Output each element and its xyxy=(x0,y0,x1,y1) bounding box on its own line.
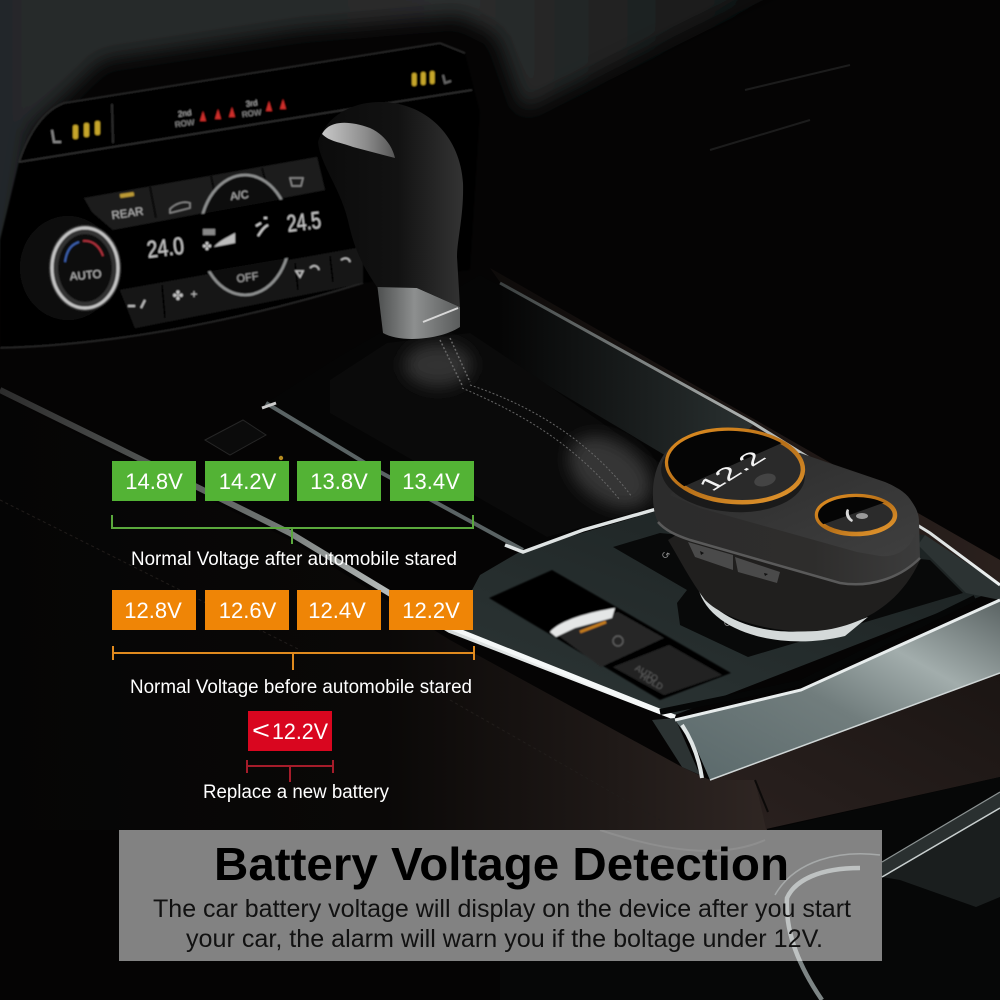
12.2V chip: 12.2V xyxy=(402,598,460,623)
drive selector panel xyxy=(613,533,963,657)
climate buttons lower row xyxy=(120,247,363,328)
right button xyxy=(735,557,780,583)
12.4V chip: 12.4V xyxy=(308,598,366,623)
device side shell xyxy=(653,446,920,584)
phone icon xyxy=(846,509,853,522)
climate control console xyxy=(0,43,480,348)
voltage reading: 12.2 xyxy=(692,448,773,495)
rear seat indicators: ROW xyxy=(174,118,195,129)
green caption: Normal Voltage after automobile stared xyxy=(131,549,457,570)
climate control console: A/C xyxy=(230,189,250,203)
rear seat indicators: ROW xyxy=(241,108,262,119)
gear boot leather xyxy=(330,333,665,537)
inner silver strip xyxy=(266,403,523,550)
green bracket xyxy=(112,515,473,544)
description: your car, the alarm will warn you if the boltage under 12V. xyxy=(186,925,823,953)
seam band xyxy=(658,522,920,584)
cup holder and lower right area xyxy=(500,777,1000,1000)
climate control console: + xyxy=(190,287,198,301)
AUTO temperature knob xyxy=(20,216,121,320)
AUTO temperature knob: AUTO xyxy=(69,269,102,283)
climate buttons upper row xyxy=(84,157,325,230)
red caption: Replace a new battery xyxy=(203,782,389,803)
voltage chart: after start (green) xyxy=(112,461,474,570)
description: The car battery voltage will display on the device after you start xyxy=(153,895,851,923)
13.4V chip: 13.4V xyxy=(402,469,460,494)
orange bracket xyxy=(113,646,474,670)
device top face xyxy=(670,453,917,556)
seat heater right xyxy=(412,71,451,86)
dashboard top surface xyxy=(0,0,810,280)
rear seat indicators xyxy=(174,98,286,129)
speaker mesh icon xyxy=(753,471,777,489)
long silver strip xyxy=(0,390,675,717)
console control surface xyxy=(452,510,997,715)
background: car interior photo scene: ↺ xyxy=(658,549,671,563)
brown upper trim xyxy=(490,268,1000,583)
13.4V chip xyxy=(390,461,474,501)
12.8V chip xyxy=(112,590,196,630)
under 12.2V chip: 12.2V xyxy=(272,719,328,744)
left button xyxy=(688,542,733,570)
description xyxy=(153,895,851,953)
A/C dial ring xyxy=(200,175,290,295)
12.6V chip: 12.6V xyxy=(219,598,277,623)
voltage warning (red) xyxy=(203,711,389,803)
bright edge under boot xyxy=(505,508,660,552)
parking switch xyxy=(555,612,664,667)
leather stitching xyxy=(0,500,660,820)
parking button recess: AUTO xyxy=(633,663,660,684)
climate control console: 24.0 xyxy=(145,233,185,264)
rear seat indicators: 2nd xyxy=(177,108,192,119)
main display ring xyxy=(661,428,806,512)
auto hold switch xyxy=(613,645,722,695)
14.2V chip xyxy=(205,461,289,501)
12.6V chip xyxy=(205,590,289,630)
gear knob xyxy=(318,102,463,339)
climate control console: ✤ xyxy=(173,288,184,303)
12.8V chip: 12.8V xyxy=(124,598,182,623)
wide silver corner trim xyxy=(652,598,1000,780)
seat heater left xyxy=(52,121,100,142)
device lower body xyxy=(668,520,920,631)
climate control console: REAR xyxy=(111,206,144,222)
climate control console: ✤ xyxy=(202,241,212,253)
car charger device xyxy=(653,410,920,641)
silver parking lever xyxy=(550,608,615,637)
14.8V chip: 14.8V xyxy=(125,469,183,494)
climate control console: 24.5 xyxy=(285,207,322,238)
rear seat indicators: 3rd xyxy=(245,98,258,109)
climate control console: OFF xyxy=(236,271,260,286)
14.8V chip xyxy=(112,461,196,501)
gear tray xyxy=(266,275,925,550)
temperature display xyxy=(113,190,353,283)
14.2V chip: 14.2V xyxy=(219,469,277,494)
call button ring xyxy=(814,494,898,536)
title: Battery Voltage Detection xyxy=(214,838,789,890)
red bracket xyxy=(247,760,333,782)
silver upper trim band xyxy=(918,535,1000,600)
under 12.2V chip: < xyxy=(252,715,270,745)
orange caption: Normal Voltage before automobile stared xyxy=(130,677,472,698)
under 12.2V chip xyxy=(248,711,332,751)
parking button recess: HOLD xyxy=(638,671,665,692)
12.4V chip xyxy=(297,590,381,630)
background: car interior photo scene: ↺ xyxy=(720,617,733,631)
13.8V chip xyxy=(297,461,381,501)
gray tray band xyxy=(500,285,753,476)
12.2V chip xyxy=(389,590,473,630)
13.8V chip: 13.8V xyxy=(310,469,368,494)
parking button recess xyxy=(489,570,731,700)
bottom translucent caption panel xyxy=(119,830,882,961)
lower right leather armrest xyxy=(710,673,1000,829)
parking lock pad xyxy=(205,420,283,467)
center console lower left leather xyxy=(0,395,767,830)
voltage chart: before start (orange) xyxy=(112,590,474,698)
dashboard vent lines xyxy=(710,65,850,150)
silver socket ring xyxy=(697,583,868,641)
